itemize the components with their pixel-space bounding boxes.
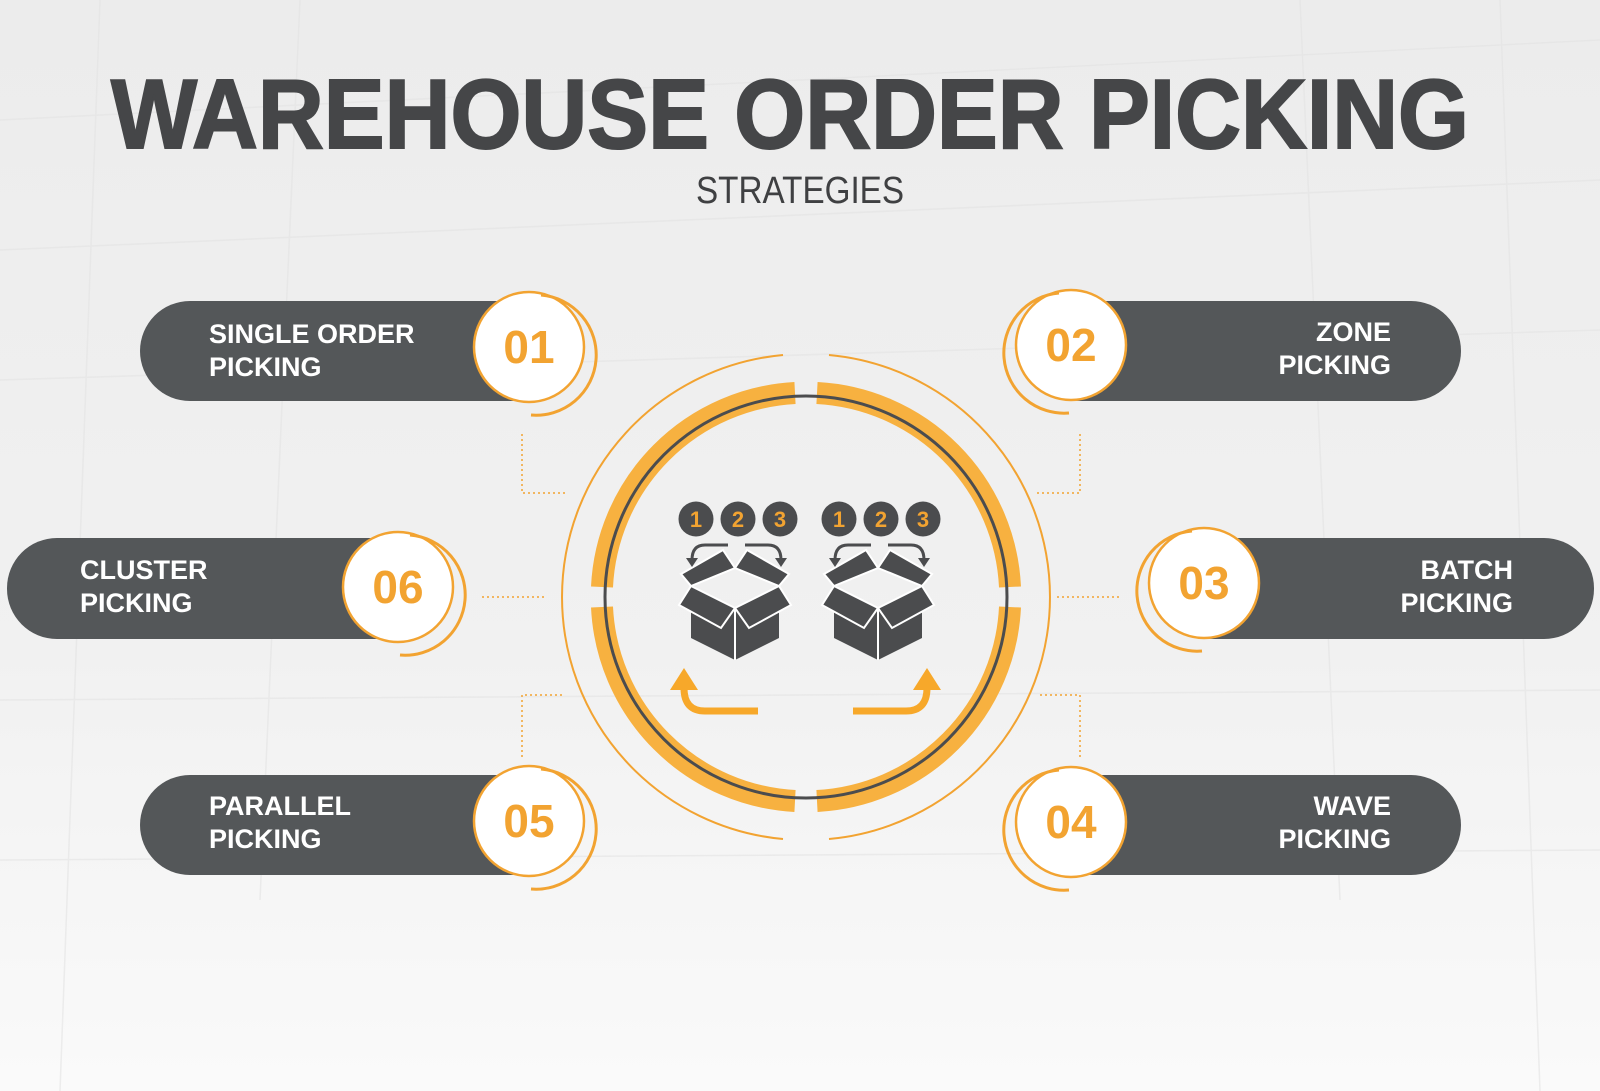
- panel: 03 batch picking: BATCH: [1421, 555, 1513, 585]
- icon: numbered items: [678, 502, 940, 536]
- panel: 06 cluster picking: [7, 532, 465, 655]
- panel: 06 cluster picking: PICKING: [80, 588, 193, 618]
- panel: 04 wave picking: WAVE: [1313, 791, 1391, 821]
- panel: 05 parallel picking: [140, 766, 596, 889]
- panel: 02 zone picking: [1004, 290, 1461, 413]
- panel: 02 zone picking: PICKING: [1278, 350, 1391, 380]
- panel: 01 single order picking: PICKING: [209, 352, 322, 382]
- panel: 01 single order picking: 01: [503, 321, 555, 373]
- panel: 03 batch picking: PICKING: [1400, 588, 1513, 618]
- icon: numbered items: 3: [917, 507, 929, 532]
- panel: 06 cluster picking: CLUSTER: [80, 555, 208, 585]
- panel: 06 cluster picking: 06: [372, 561, 424, 613]
- icon: numbered items: 2: [732, 507, 744, 532]
- icon: boxes: [679, 545, 934, 660]
- central diagram: [562, 355, 1050, 839]
- icon: numbered items: 2: [875, 507, 887, 532]
- title: WAREHOUSE ORDER PICKING: [111, 59, 1469, 169]
- panel: 05 parallel picking: PARALLEL: [209, 791, 351, 821]
- icon: numbered items: 3: [774, 507, 786, 532]
- icon: numbered items: 1: [690, 507, 702, 532]
- panel: 05 parallel picking: 05: [503, 795, 555, 847]
- panel: 02 zone picking: ZONE: [1316, 317, 1391, 347]
- panel: 05 parallel picking: PICKING: [209, 824, 322, 854]
- panel: 02 zone picking: 02: [1045, 319, 1097, 371]
- connectors: [482, 434, 1120, 757]
- panel: 01 single order picking: SINGLE ORDER: [209, 319, 415, 349]
- panel: 04 wave picking: PICKING: [1278, 824, 1391, 854]
- subtitle: STRATEGIES: [696, 170, 904, 212]
- panel: 04 wave picking: [1004, 767, 1461, 890]
- icon: numbered items: 1: [833, 507, 845, 532]
- panel: 04 wave picking: 04: [1045, 796, 1097, 848]
- panel: 01 single order picking: [140, 292, 596, 415]
- panel: 03 batch picking: 03: [1178, 557, 1230, 609]
- arrows: orange: [670, 668, 941, 711]
- panel: 03 batch picking: [1137, 528, 1594, 651]
